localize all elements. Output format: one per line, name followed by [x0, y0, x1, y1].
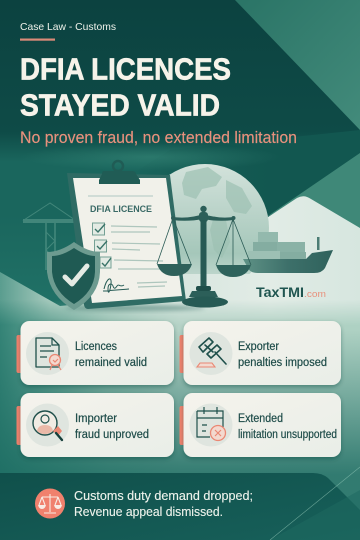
card text: limitation unsupported — [238, 429, 337, 441]
card text: fraud unproved — [75, 429, 149, 441]
card text — [238, 341, 327, 369]
card: importer fraud unproved — [16, 393, 174, 457]
card text: Importer — [75, 413, 117, 425]
outcome text — [74, 489, 253, 519]
icon: shield with check — [47, 242, 100, 310]
card: exporter penalties imposed — [180, 321, 341, 385]
hero illustration — [23, 161, 333, 311]
card text: penalties imposed — [238, 357, 327, 369]
title: STAYED VALID — [20, 88, 220, 122]
accent rule — [20, 38, 55, 41]
card text: Extended — [238, 413, 283, 425]
licence checklist — [88, 196, 167, 287]
outcome text: Revenue appeal dismissed. — [74, 505, 223, 519]
logo: TaxTMI.com: .com — [304, 289, 326, 299]
icon: crane — [23, 203, 76, 270]
icon: calendar with cross — [190, 404, 232, 446]
card text: Exporter — [238, 341, 279, 353]
card text — [75, 413, 149, 441]
title — [20, 52, 231, 122]
card: extended limitation unsupported — [180, 393, 341, 457]
eyebrow: case law customs: Case Law - Customs — [20, 21, 116, 33]
title: DFIA LICENCES — [20, 52, 231, 86]
licence heading: DFIA LICENCE — [90, 204, 153, 215]
icon: gavel — [190, 332, 232, 375]
icon: clipboard with licence — [65, 161, 205, 311]
card: licences remained valid — [16, 321, 174, 385]
card text: remained valid — [75, 357, 147, 369]
outcome text: Customs duty demand dropped; — [74, 489, 253, 503]
icon: scales in circle — [35, 488, 65, 518]
logo: TaxTMI.com — [256, 284, 326, 300]
card text — [238, 413, 337, 441]
subtitle: No proven fraud, no extended limitation — [20, 128, 297, 147]
icon: person under magnifier — [26, 404, 69, 446]
signature — [103, 279, 129, 292]
callout: outcome — [35, 488, 253, 519]
icon: balance scale — [157, 206, 251, 308]
icon: cargo ship — [243, 232, 333, 273]
card text — [75, 341, 147, 369]
icon: globe — [169, 164, 269, 274]
logo: TaxTMI.com: TaxTMI — [256, 284, 304, 300]
card text: Licences — [75, 341, 117, 353]
icon: document with seal — [26, 332, 69, 375]
